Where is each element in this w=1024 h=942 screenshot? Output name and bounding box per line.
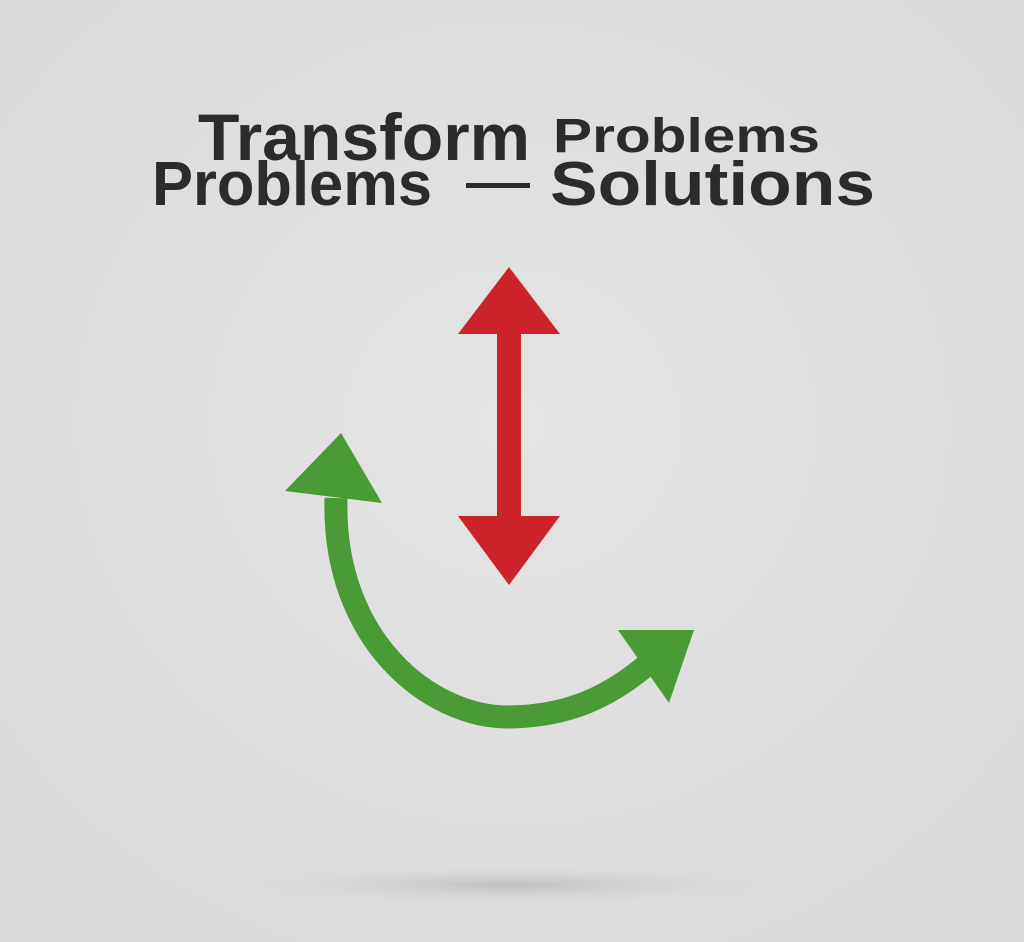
green curved arrow: [285, 433, 694, 717]
floor shadow: [210, 863, 810, 907]
title: Problems: [152, 150, 432, 219]
title: Transform: [198, 100, 530, 174]
title: [152, 100, 875, 219]
red double arrow: [458, 267, 560, 585]
title: Solutions: [550, 150, 875, 219]
title: Problems: [553, 110, 820, 163]
